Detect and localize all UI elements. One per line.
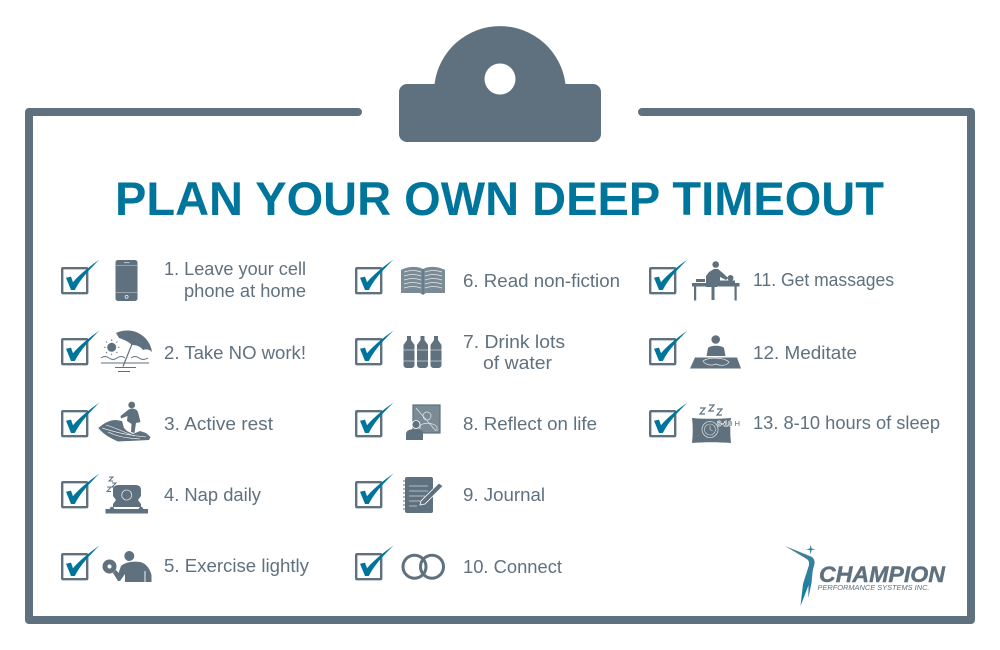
item 11: get massages: 11. Get massages	[753, 270, 894, 290]
item 4: nap daily: 4. Nap daily	[164, 485, 261, 505]
item 7: drink lots of water	[356, 330, 565, 373]
item 13: 8-10 hours of sleep: 13. 8-10 hours of sleep	[753, 413, 940, 433]
icon: water bottles	[403, 336, 442, 368]
item 6: read non-fiction: 6. Read non-fiction	[463, 271, 620, 291]
item 12: meditate: 12. Meditate	[753, 343, 857, 363]
clipboard clip	[399, 26, 601, 142]
item 12: meditate	[650, 330, 857, 368]
title: PLAN YOUR OWN DEEP TIMEOUT	[115, 173, 884, 226]
item 7: drink lots of water: of water	[483, 353, 552, 373]
icon: beach umbrella	[101, 330, 152, 372]
icon: pillow and clock: 8-10 H	[717, 421, 740, 428]
icon: meditating person	[690, 335, 741, 368]
item 1: leave cell phone at home	[62, 259, 306, 301]
icon: napping person	[106, 477, 148, 514]
item 13: 8-10 hours of sleep	[650, 402, 940, 443]
item 2: take no work: 2. Take NO work!	[164, 343, 306, 363]
item 2: take no work	[62, 330, 306, 372]
clipboard frame	[29, 112, 971, 620]
item 8: reflect on life: 8. Reflect on life	[463, 414, 597, 434]
icon: person lifting dumbbell	[102, 551, 152, 582]
icon: phone	[116, 260, 138, 301]
icon: pillow and clock	[692, 405, 740, 443]
item 9: journal: 9. Journal	[463, 485, 545, 505]
logo: Champion Performance Systems: CHAMPION	[819, 562, 946, 587]
icon: notebook and pen	[403, 477, 443, 513]
item 10: connect	[356, 546, 562, 579]
item 5: exercise lightly: 5. Exercise lightly	[164, 556, 309, 576]
item 8: reflect on life	[356, 402, 597, 440]
item 11: get massages	[650, 260, 894, 300]
item 10: connect: 10. Connect	[463, 557, 562, 577]
icon: interlocking rings	[403, 555, 444, 578]
item 3: active rest: 3. Active rest	[164, 414, 273, 434]
logo: Champion Performance Systems: PERFORMANCE SYSTEMS INC.	[818, 583, 930, 592]
item 9: journal	[356, 474, 545, 513]
logo figure	[785, 544, 816, 606]
icon: open book	[401, 267, 445, 295]
icon: massage table	[692, 261, 740, 300]
icon: jet ski	[98, 402, 150, 442]
item 4: nap daily	[62, 474, 261, 514]
item 1: leave cell phone at home: phone at home	[184, 281, 306, 301]
item 3: active rest	[62, 402, 273, 442]
logo: Champion Performance Systems	[785, 544, 946, 606]
item 7: drink lots of water: 7. Drink lots	[463, 332, 565, 352]
item 1: leave cell phone at home: 1. Leave your cell	[164, 259, 306, 279]
icon: person at mirror	[406, 405, 440, 440]
item 6: read non-fiction	[356, 260, 620, 295]
item 5: exercise lightly	[62, 546, 309, 582]
